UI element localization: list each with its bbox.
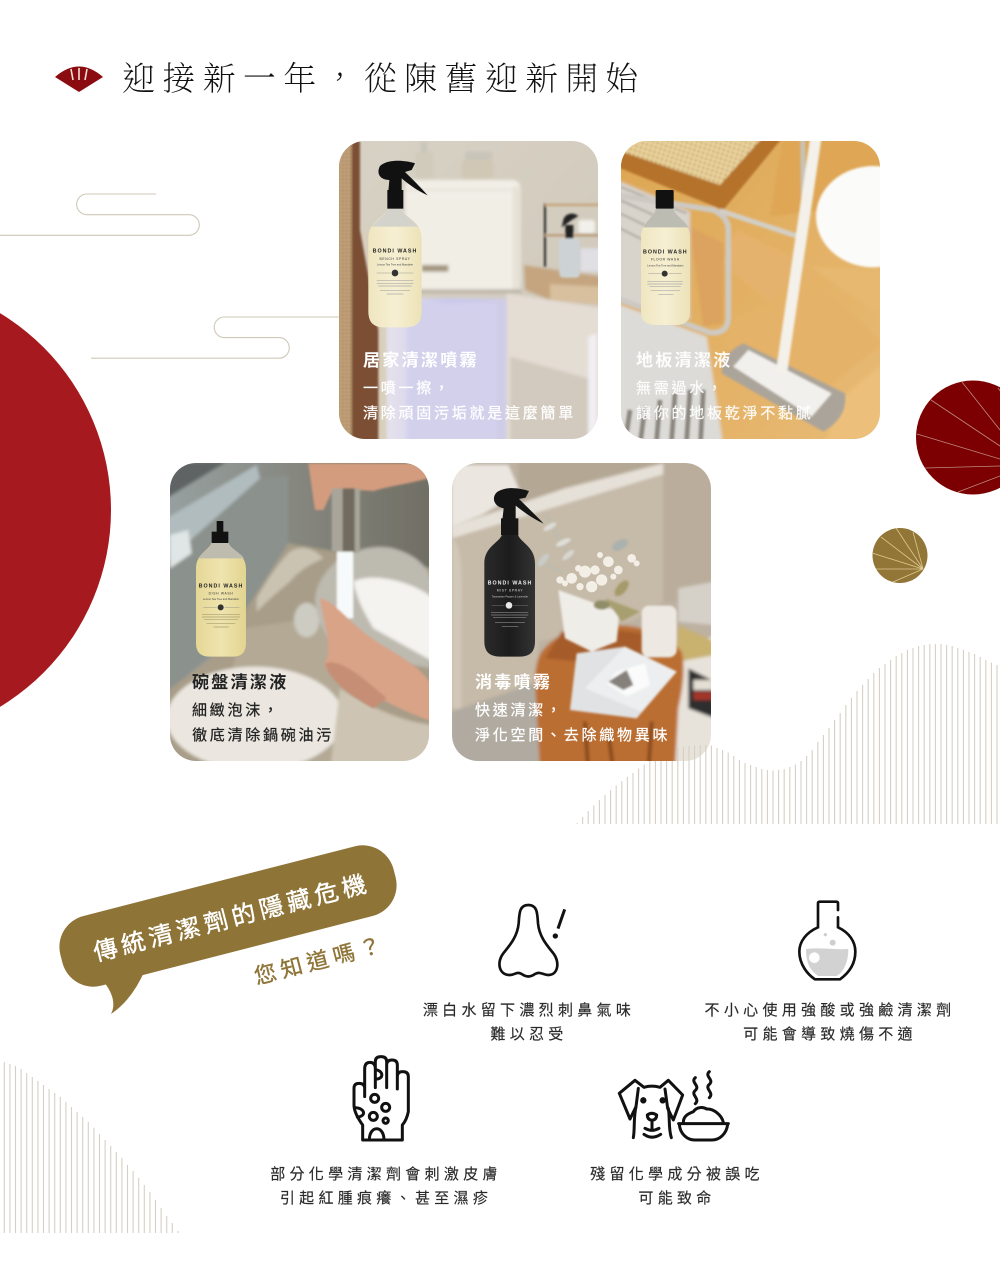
big red circle bbox=[0, 280, 111, 740]
wave stripes right bbox=[577, 644, 997, 824]
text: bleach smell bbox=[423, 1002, 635, 1043]
product: mist spray bottle: MIST SPRAY bbox=[497, 589, 523, 593]
caption: mist spray: 快速清潔， bbox=[475, 702, 564, 719]
bubble heading: 傳統清潔劑的隱藏危機 bbox=[91, 870, 374, 967]
product: mist spray bottle bbox=[484, 488, 544, 657]
subheading: 您知道嗎？ bbox=[252, 932, 389, 989]
text: pet ingestion: 殘留化學成分被誤吃 bbox=[590, 1165, 764, 1183]
icon: flask bbox=[799, 902, 855, 979]
product: floor wash bottle: BONDI WASH bbox=[643, 250, 688, 256]
caption: mist spray: 淨化空間、去除織物異味 bbox=[475, 727, 670, 744]
product: mist spray bottle: Tasmanian Pepper & Lavender bbox=[492, 595, 528, 599]
caption: bench spray bbox=[363, 350, 576, 422]
speech bubble bbox=[52, 838, 404, 1014]
product: dish wash bottle: BONDI WASH bbox=[199, 584, 243, 590]
icon: dog and bowl bbox=[619, 1072, 728, 1140]
product: mist spray bottle: BONDI WASH bbox=[488, 581, 532, 587]
caption: floor wash bbox=[636, 351, 814, 422]
photo: sofa and stump table bbox=[452, 463, 711, 761]
product: bench spray bottle: BENCH SPRAY bbox=[380, 257, 411, 261]
text: strong acid bbox=[705, 1002, 955, 1043]
text: strong acid: 可能會導致燒傷不適 bbox=[743, 1025, 917, 1043]
product: floor wash bottle bbox=[641, 190, 690, 325]
product: dish wash bottle: DISH WASH bbox=[209, 591, 233, 595]
product: bench spray bottle: BONDI WASH bbox=[373, 249, 417, 255]
icon: irritated hand bbox=[354, 1057, 408, 1140]
title: 迎接新一年，從陳舊迎新開始 bbox=[122, 61, 646, 98]
text: skin irritation bbox=[270, 1165, 502, 1207]
caption: dish wash bbox=[192, 673, 334, 744]
text: pet ingestion bbox=[590, 1165, 764, 1207]
dark red fan circle bbox=[916, 380, 1000, 494]
product: bench spray bottle: Lemon Tea Tree and Mandarin bbox=[377, 263, 414, 267]
panel: bench spray card bbox=[339, 141, 598, 439]
caption: dish wash: 細緻泡沫， bbox=[192, 702, 281, 719]
caption: floor wash: 無需過水， bbox=[636, 380, 725, 397]
product: floor wash bottle: FLOOR WASH bbox=[651, 258, 680, 262]
panel: floor wash card bbox=[621, 141, 880, 439]
icon: red fan bbox=[55, 66, 103, 92]
flowers bbox=[556, 552, 640, 592]
text: strong acid: 不小心使用強酸或強鹼清潔劑 bbox=[705, 1002, 955, 1019]
caption: dish wash: 碗盤清潔液 bbox=[192, 673, 288, 692]
photo: mop on parquet bbox=[621, 141, 880, 439]
photo: sink washing bbox=[170, 463, 429, 761]
text: skin irritation: 部分化學清潔劑會刺激皮膚 bbox=[270, 1165, 502, 1183]
panel: mist spray card bbox=[452, 463, 711, 761]
caption: bench spray: 居家清潔噴霧 bbox=[363, 350, 479, 370]
wave stripes left bbox=[4, 1062, 178, 1233]
product: bench spray bottle bbox=[368, 161, 428, 327]
stripes seen through card bbox=[678, 745, 706, 761]
caption: mist spray bbox=[475, 673, 670, 744]
gold fan circle bbox=[872, 528, 928, 583]
text: skin irritation: 引起紅腫痕癢、甚至濕疹 bbox=[280, 1189, 492, 1207]
caption: bench spray: 清除頑固污垢就是這麼簡單 bbox=[363, 404, 576, 422]
icon: nose bbox=[499, 905, 565, 976]
caption: floor wash: 地板清潔液 bbox=[636, 351, 732, 370]
caption: floor wash: 讓你的地板乾淨不黏膩 bbox=[636, 404, 814, 422]
caption: dish wash: 徹底清除鍋碗油污 bbox=[192, 727, 334, 744]
text: pet ingestion: 可能致命 bbox=[638, 1189, 716, 1207]
cloud line: lower bbox=[91, 317, 339, 358]
caption: bench spray: 一噴一擦， bbox=[363, 380, 452, 397]
text: bleach smell: 漂白水留下濃烈刺鼻氣味 bbox=[423, 1002, 635, 1019]
text: bleach smell: 難以忍受 bbox=[490, 1026, 568, 1043]
panel: dish wash card bbox=[170, 463, 429, 761]
cloud line: upper bbox=[0, 194, 199, 235]
photo: kitchen fridge bbox=[339, 141, 598, 439]
product: floor wash bottle: Lemon Tea Tree and Mandarin bbox=[647, 263, 684, 267]
product: dish wash bottle bbox=[196, 521, 246, 657]
product: dish wash bottle: Lemon Tea Tree and Mandarin bbox=[203, 597, 240, 601]
caption: mist spray: 消毒噴霧 bbox=[475, 673, 552, 692]
